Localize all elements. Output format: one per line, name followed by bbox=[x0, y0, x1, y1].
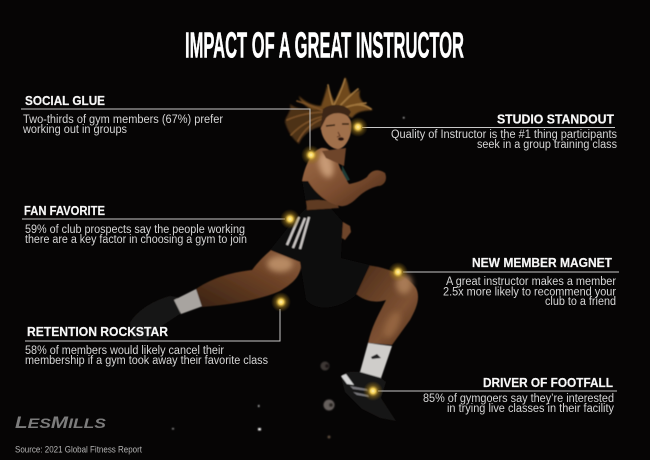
callout: studio standout: seek in a group training class bbox=[477, 139, 617, 151]
callout: social glue bbox=[21, 93, 321, 165]
callout: retention rockstar: RETENTION ROCKSTAR bbox=[27, 324, 169, 339]
front leg with sock and shoe bbox=[341, 265, 418, 421]
callout: driver of footfall bbox=[363, 375, 617, 415]
source note: Source: 2021 Global Fitness Report bbox=[15, 444, 142, 454]
callout: new member magnet: club to a friend bbox=[545, 296, 616, 308]
callout: driver of footfall: DRIVER OF FOOTFALL bbox=[483, 375, 613, 390]
logo: Les Mills: LES MILLS bbox=[15, 414, 107, 432]
callout: retention rockstar bbox=[25, 292, 291, 367]
athlete figure bbox=[130, 77, 418, 421]
head bbox=[321, 113, 351, 166]
callout: fan favorite: there are a key factor in choosing a gym to join bbox=[25, 234, 247, 246]
shorts with stripes bbox=[270, 205, 370, 308]
arm bbox=[302, 148, 386, 206]
callout: retention rockstar: 58% of members would likely cancel their bbox=[25, 345, 224, 357]
callout: retention rockstar: membership if a gym took away their favorite class bbox=[25, 355, 268, 367]
callout: fan favorite bbox=[22, 203, 300, 246]
callout: driver of footfall: 85% of gymgoers say they’re interested bbox=[423, 393, 614, 405]
torso and hand bbox=[302, 165, 351, 240]
gym equipment in the background bbox=[172, 117, 404, 438]
hair bbox=[285, 77, 373, 144]
back leg with sock and shoe bbox=[130, 250, 301, 341]
callout: studio standout: Quality of Instructor is the #1 thing participants bbox=[391, 129, 617, 141]
callout: social glue: Two-thirds of gym members (67%) prefer bbox=[23, 114, 223, 126]
callout: fan favorite: FAN FAVORITE bbox=[24, 203, 105, 218]
callout: new member magnet: A great instructor makes a member bbox=[446, 276, 616, 288]
callout: new member magnet: 2.5x more likely to recommend your bbox=[443, 286, 616, 298]
callout: driver of footfall: in trying live classes in their facility bbox=[447, 403, 614, 415]
callout: new member magnet bbox=[388, 255, 619, 308]
callout: fan favorite: 59% of club prospects say the people working bbox=[25, 224, 245, 236]
callout: social glue: working out in groups bbox=[22, 124, 127, 136]
callout: social glue: SOCIAL GLUE bbox=[25, 93, 105, 108]
callout: studio standout bbox=[348, 112, 617, 151]
callout: new member magnet: NEW MEMBER MAGNET bbox=[472, 255, 612, 270]
callout: studio standout: STUDIO STANDOUT bbox=[497, 112, 614, 126]
